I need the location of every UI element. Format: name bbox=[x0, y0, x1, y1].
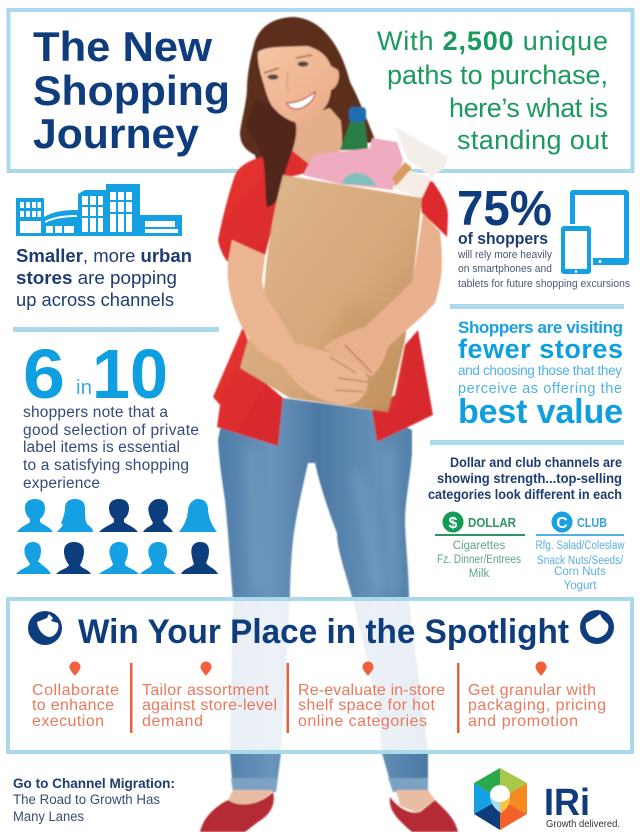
text: dollar and club channels: showing strength...top-selling bbox=[437, 471, 622, 486]
75 percent of shoppers: will rely more heavily bbox=[457, 249, 552, 261]
fewer stores best value: perceive as offering the bbox=[458, 381, 622, 397]
tip: tailor assortment bbox=[142, 662, 277, 730]
tip: re-evaluate shelf space: Re-evaluate in-store bbox=[298, 682, 445, 699]
icon: club letter c: C bbox=[556, 515, 568, 532]
icon: bag badge left bbox=[28, 611, 62, 645]
icon: bag badge right bbox=[580, 610, 614, 644]
smile bbox=[287, 92, 315, 109]
text: smaller urban stores: up across channels bbox=[16, 290, 174, 310]
tip: get granular bbox=[468, 662, 606, 730]
header panel frame bbox=[8, 10, 632, 171]
jeans cuffs bbox=[231, 778, 428, 792]
panel: win your place in the spotlight bbox=[8, 599, 632, 752]
neck bbox=[289, 108, 342, 165]
dollar channel column: Cigarettes bbox=[453, 540, 505, 552]
subheading: 2,500 unique paths: here’s what is bbox=[449, 93, 608, 123]
left foot bbox=[228, 790, 273, 804]
heading: win your place: Win Your Place in the Spotlight bbox=[78, 613, 569, 651]
club channel column: Corn Nuts bbox=[554, 566, 606, 578]
text: dollar and club channels: categories look different in each bbox=[428, 487, 622, 502]
subheading: 2,500 unique paths: With 2,500 unique bbox=[377, 26, 608, 56]
right foot bbox=[396, 790, 435, 813]
75 percent of shoppers: on smartphones and bbox=[458, 263, 552, 275]
club channel column: Rfg. Salad/Coleslaw bbox=[536, 540, 625, 552]
fewer stores best value: fewer stores bbox=[458, 334, 623, 364]
shirt shoulders and left sleeve bbox=[218, 145, 330, 262]
subheading: 2,500 unique paths bbox=[377, 26, 608, 155]
club channel column: Snack Nuts/Seeds/ bbox=[537, 555, 624, 567]
jeans bbox=[218, 398, 428, 792]
icon: dollar sign: $ bbox=[449, 515, 458, 532]
bottle bbox=[340, 122, 368, 150]
tip: re-evaluate shelf space: shelf space for hot bbox=[298, 697, 436, 714]
hair lock over shirt bbox=[246, 100, 296, 207]
groceries bbox=[395, 127, 448, 177]
hair right side bbox=[333, 55, 374, 146]
shirt right sleeve bbox=[416, 176, 448, 237]
text: smaller urban stores: stores are popping bbox=[16, 268, 177, 288]
75 percent of shoppers: 75% bbox=[457, 182, 552, 236]
left arm and hand bbox=[228, 240, 368, 405]
dollar channel column: Milk bbox=[469, 568, 489, 580]
footer: channel migration link: The Road to Growth Has bbox=[13, 792, 160, 807]
logo: iri hexagon bbox=[474, 768, 527, 830]
club channel column bbox=[536, 512, 625, 592]
6 in 10 statistic: 6 bbox=[23, 335, 65, 413]
smaller urban stores section bbox=[16, 184, 192, 310]
paper bag bbox=[240, 175, 422, 412]
text: smaller urban stores: Smaller, more urban bbox=[16, 246, 192, 266]
jeans soft fades bbox=[250, 450, 395, 590]
75 percent of shoppers: tablets for future shopping excursions bbox=[458, 278, 630, 290]
fewer stores best value: Shoppers are visiting bbox=[458, 318, 623, 337]
tip: get granular: Get granular with bbox=[468, 682, 596, 699]
face bbox=[258, 46, 339, 123]
tip: collaborate bbox=[32, 662, 119, 730]
icon: city buildings bbox=[16, 184, 182, 236]
club channel column: CLUB bbox=[577, 515, 607, 530]
finger lines bbox=[330, 345, 372, 392]
tip: tailor assortment: Tailor assortment bbox=[142, 682, 270, 699]
tip: tailor assortment: against store-level bbox=[142, 697, 277, 714]
dollar channel column: Fz. Dinner/Entrees bbox=[437, 554, 521, 566]
75 percent of shoppers: of shoppers bbox=[458, 230, 548, 248]
6 in 10 statistic bbox=[23, 335, 168, 413]
woman holding grocery bag bbox=[200, 17, 458, 832]
tip: get granular: and promotion bbox=[468, 713, 578, 730]
tip: tailor assortment: demand bbox=[142, 713, 203, 730]
text: dollar and club channels: Dollar and club channels are bbox=[450, 455, 622, 470]
heading: the new shopping journey bbox=[33, 23, 230, 157]
footer: channel migration link: Go to Channel Migration: bbox=[13, 776, 175, 791]
logo: iri wordmark: Growth delivered. bbox=[546, 819, 620, 830]
left shoe bbox=[200, 792, 274, 832]
tip: collaborate: Collaborate bbox=[32, 682, 119, 699]
heading: the new shopping journey: The New bbox=[33, 23, 212, 70]
icon grid: ten shopper silhouettes bbox=[16, 499, 218, 574]
fewer stores best value: best value bbox=[458, 393, 623, 431]
fewer stores best value: and choosing those that they bbox=[458, 363, 622, 378]
text: private label: label items is essential bbox=[23, 439, 180, 456]
dollar channel column: DOLLAR bbox=[468, 515, 517, 530]
6 in 10 statistic: 10 bbox=[92, 335, 168, 413]
shirt lower right bbox=[372, 330, 433, 442]
tip: re-evaluate shelf space: online categories bbox=[298, 713, 427, 730]
right arm and hand bbox=[323, 213, 442, 377]
dollar channel column bbox=[435, 512, 525, 580]
text: private label: good selection of private bbox=[23, 422, 199, 439]
fewer stores best value bbox=[458, 318, 623, 431]
tip: get granular: packaging, pricing bbox=[468, 697, 606, 714]
footer: channel migration link bbox=[13, 776, 175, 824]
6 in 10 statistic: in bbox=[76, 377, 92, 399]
logo: iri wordmark bbox=[544, 782, 620, 830]
tip: re-evaluate shelf space bbox=[298, 662, 445, 730]
shirt lower left bbox=[213, 327, 283, 446]
hair bbox=[240, 17, 376, 207]
footer: channel migration link: Many Lanes bbox=[13, 809, 84, 824]
tip: collaborate: execution bbox=[32, 713, 104, 730]
heading: the new shopping journey: Journey bbox=[33, 110, 200, 157]
logo: iri wordmark: IRi bbox=[544, 782, 590, 824]
heading: the new shopping journey: Shopping bbox=[33, 67, 230, 114]
text: private label: experience bbox=[23, 475, 100, 492]
text: private label: shoppers note that a bbox=[23, 404, 168, 421]
text: smaller urban stores bbox=[16, 246, 192, 310]
text: private label: to a satisfying shopping bbox=[23, 457, 189, 474]
75 percent of shoppers bbox=[457, 182, 630, 290]
tip: collaborate: to enhance bbox=[32, 697, 114, 714]
club channel column: Yogurt bbox=[564, 580, 597, 592]
subheading: 2,500 unique paths: standing out bbox=[457, 125, 608, 155]
right shoe bbox=[390, 797, 458, 832]
bag shadow folds bbox=[322, 300, 402, 408]
icon: tablet and smartphone bbox=[559, 190, 629, 276]
eyes and brows bbox=[264, 55, 312, 91]
subheading: 2,500 unique paths: paths to purchase, bbox=[387, 60, 608, 90]
text: private label bbox=[23, 404, 199, 492]
text: dollar and club channels bbox=[428, 455, 622, 502]
